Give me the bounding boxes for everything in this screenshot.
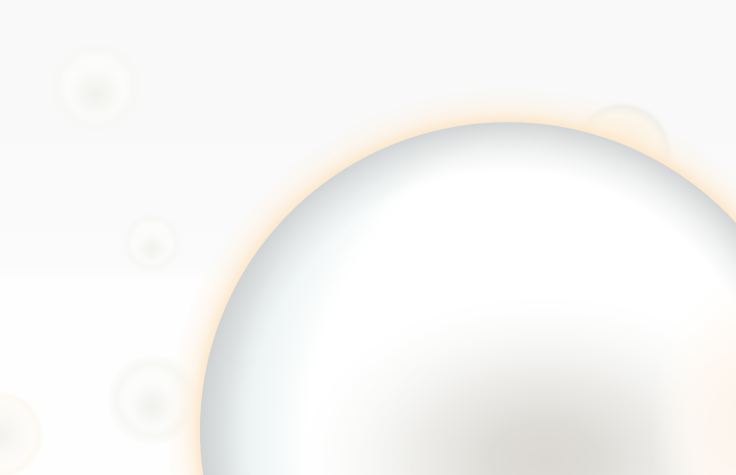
large pearl (200, 122, 736, 475)
small blurred pearl: behind large pearl (570, 100, 674, 204)
warm right glow (200, 122, 736, 475)
small blurred pearl: lower (107, 354, 199, 446)
small blurred pearl: top left (48, 39, 144, 135)
small blurred pearl: bottom left edge (0, 385, 46, 475)
pearl base with cool left sheen (200, 122, 736, 475)
grey rim shading (200, 122, 736, 475)
small blurred pearl: middle (121, 212, 183, 274)
lower brown-grey shadow (200, 122, 736, 475)
